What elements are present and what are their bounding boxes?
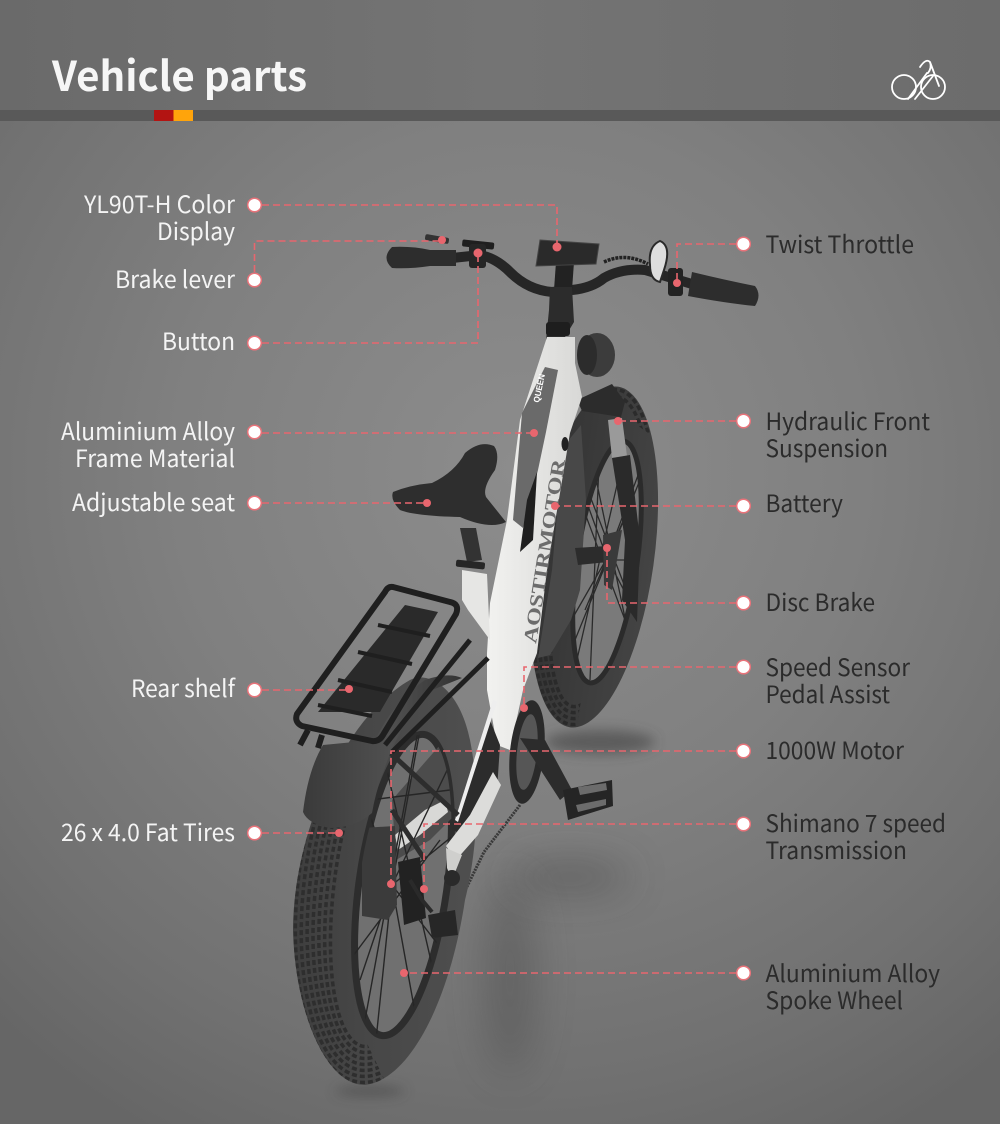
callout: Speed Sensor Pedal Assist xyxy=(520,648,911,712)
callout: Adjustable seat: Adjustable seat xyxy=(72,483,235,518)
model label: QUEEN xyxy=(531,373,547,403)
title: Vehicle parts xyxy=(51,43,307,103)
callout: Shimano 7 speed Transmission: Transmission xyxy=(766,831,907,866)
callout: Shimano 7 speed Transmission: Shimano 7 speed xyxy=(766,804,946,839)
pedal xyxy=(563,780,613,820)
rear wheel xyxy=(293,678,475,1085)
callout: 1000W Motor xyxy=(387,731,905,888)
callout: Aluminium Alloy Spoke Wheel: Spoke Wheel xyxy=(766,981,903,1016)
cassette xyxy=(398,857,426,925)
front lamp xyxy=(577,333,615,377)
stem xyxy=(546,262,574,342)
callout: Hydraulic Front Suspension: Hydraulic Front xyxy=(766,402,930,437)
frame xyxy=(487,337,582,750)
callout: Aluminium Alloy Frame Material: Aluminium Alloy xyxy=(61,412,235,447)
callout: Hydraulic Front Suspension: Suspension xyxy=(766,429,888,464)
chainring and pedal xyxy=(457,699,613,907)
brand label: AOSTIRMOTOR xyxy=(520,457,570,645)
display xyxy=(536,240,599,266)
rear shelf xyxy=(296,587,488,752)
ground shadows xyxy=(335,730,655,1096)
header divider bar xyxy=(0,110,1000,121)
callout: Hydraulic Front Suspension xyxy=(614,402,930,464)
callout: Rear shelf: Rear shelf xyxy=(131,669,236,704)
callout: Button: Button xyxy=(162,322,235,357)
front fender xyxy=(538,425,586,658)
battery slot xyxy=(520,472,537,552)
header band xyxy=(0,0,1000,110)
callout: Rear shelf xyxy=(131,669,353,704)
callout: Speed Sensor Pedal Assist: Pedal Assist xyxy=(766,675,890,710)
callout: YL90T-H Color Display xyxy=(83,185,562,252)
rear fender xyxy=(303,675,462,828)
callout: Brake lever xyxy=(115,236,446,295)
seat xyxy=(392,444,506,525)
callout: Shimano 7 speed Transmission xyxy=(420,804,946,893)
callout: Brake lever: Brake lever xyxy=(115,260,236,295)
handlebar xyxy=(386,234,758,306)
front fork and suspension xyxy=(575,384,640,622)
callout: Disc Brake xyxy=(603,544,875,618)
callout: Speed Sensor Pedal Assist: Speed Sensor xyxy=(766,648,911,683)
far wheel and frame seen through the spokes xyxy=(392,747,452,859)
callout: Battery xyxy=(551,484,843,519)
callout: Battery: Battery xyxy=(766,484,843,519)
icon: bicycle xyxy=(892,61,945,99)
callout: Twist Throttle xyxy=(673,225,914,287)
callout: Aluminium Alloy Frame Material: Frame Material xyxy=(75,439,235,474)
rear drivetrain and stays xyxy=(385,700,501,938)
seat post xyxy=(456,528,490,640)
motor hub xyxy=(362,826,397,920)
frame decal panel xyxy=(513,367,558,528)
callout: Adjustable seat xyxy=(72,483,431,518)
callout: Button xyxy=(162,248,482,357)
callout: Aluminium Alloy Spoke Wheel: Aluminium Alloy xyxy=(766,954,940,989)
callout: 26 x 4.0 Fat Tires xyxy=(61,813,343,848)
callout: Twist Throttle: Twist Throttle xyxy=(766,225,914,260)
callout: 26 x 4.0 Fat Tires: 26 x 4.0 Fat Tires xyxy=(61,813,235,848)
callout: 1000W Motor: 1000W Motor xyxy=(766,731,905,766)
chain xyxy=(457,805,520,907)
callout: Aluminium Alloy Spoke Wheel xyxy=(400,954,940,1016)
front wheel xyxy=(534,386,658,728)
callout: YL90T-H Color Display: Display xyxy=(157,212,235,247)
callout: Disc Brake: Disc Brake xyxy=(766,583,875,618)
callout: YL90T-H Color Display: YL90T-H Color xyxy=(83,185,236,220)
callout: Aluminium Alloy Frame Material xyxy=(61,412,538,474)
